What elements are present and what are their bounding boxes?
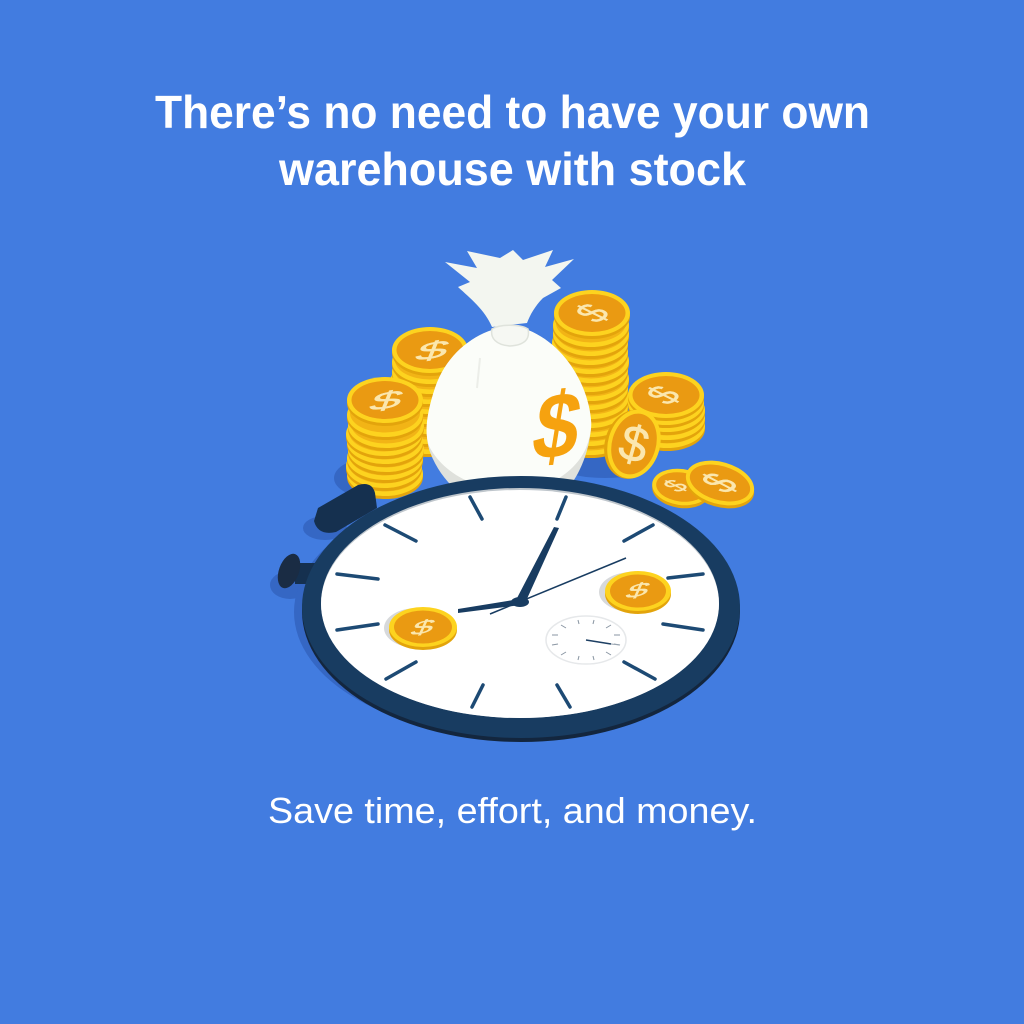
flat coin: rear: $: [657, 476, 695, 496]
flat coin: front: $: [691, 467, 749, 500]
coin stack: short right: [628, 372, 705, 451]
coin stack: tall right: $: [566, 298, 619, 328]
clock hands: [458, 527, 626, 614]
stopwatch button: top: [314, 484, 377, 533]
coin stack: tall right: [552, 290, 630, 458]
illustration: money and stopwatch: [270, 250, 759, 742]
coin stack: back left: $: [411, 334, 454, 367]
subtitle: Save time, effort, and money.: [268, 790, 757, 831]
coin stack: short right: $: [637, 380, 690, 410]
coin on dial: left: [384, 607, 457, 650]
dollar sign on bag: $: [526, 372, 589, 480]
money bag: [427, 250, 591, 490]
flat coin: rear: [650, 465, 712, 512]
tilted coin: [596, 402, 669, 486]
stopwatch: [302, 476, 740, 742]
coin on dial: right: $: [622, 577, 654, 603]
title: warehouse with stock: [278, 143, 746, 195]
title: There’s no need to have your own: [155, 86, 870, 138]
coin on dial: right: [599, 571, 671, 614]
hour ticks: [337, 497, 703, 707]
tilted coin: $: [613, 413, 655, 475]
stopwatch button: side: [273, 551, 321, 591]
ground shadows: [270, 454, 728, 736]
small dial: [546, 616, 626, 664]
title: [155, 86, 870, 195]
coin stack: back left: [390, 327, 468, 457]
coin stack: front left: [346, 377, 424, 499]
coin stack: front left: $: [365, 384, 408, 417]
coin on dial: left: $: [407, 614, 439, 640]
flat coin: front: [681, 453, 759, 516]
